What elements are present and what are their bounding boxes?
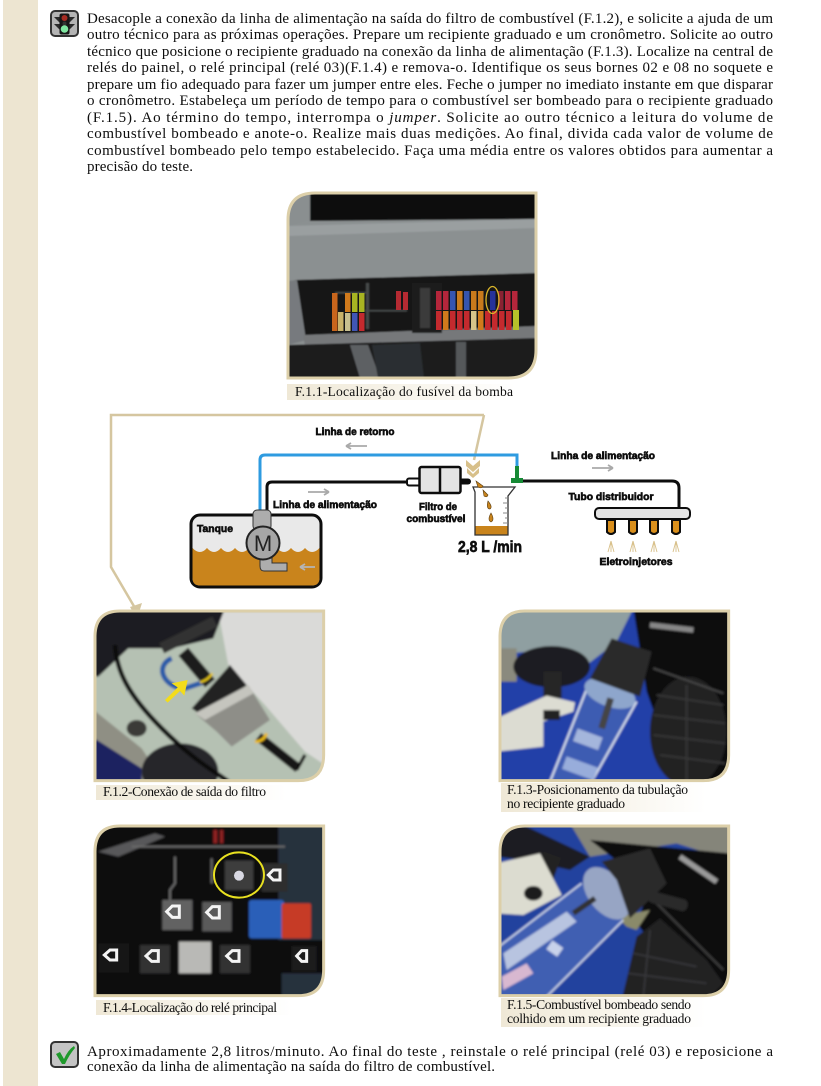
diagram labels: Linha de alimentação [551,450,655,462]
diagram labels: Filtro de [419,501,457,513]
instruction text block: prepare um fio adequado para fazer um jumper entre eles. Feche o jumper no imediato instante em que disparar [87,77,773,93]
instruction text block: combustível bombeado pelo tempo estabelecido. Faça uma média entre os valores obtidos para aumentar a [87,143,773,159]
fuses [332,291,519,331]
caption F.1.2: F.1.2-Conexão de saída do filtro [103,784,266,799]
photo F.1.1: fuse box [287,192,537,379]
answer text block: conexão da linha de alimentação na saída do filtro de combustível. [87,1059,495,1075]
photo F.1.4: relay panel [92,823,328,1000]
highlight ellipse on pump fuse [486,286,499,314]
caption F.1.1: F.1.1-Localização do fusível da bomba [295,384,513,399]
instruction text block: combustível bombeado e anote-o. Realize mais duas medições. Ao final, divida cada valor de volume de [87,126,773,142]
caption F.1.4: F.1.4-Localização do relé principal [103,1000,277,1015]
diagram labels: Tanque [197,523,233,535]
caption F.1.3: F.1.3-Posicionamento da tubulação [507,782,688,797]
instruction text block [87,11,773,175]
fuel filter [407,467,471,493]
yellow highlight ellipse on main relay [214,852,264,898]
diagram labels [197,426,673,568]
yellow arrow [165,680,188,703]
icon: green check mark [51,1042,78,1067]
instruction text block: precisão do teste. [87,159,193,175]
diagram labels: 2,8 L /min [458,539,522,556]
fuel tank with pump [191,510,321,587]
fuel system diagram [111,415,690,619]
photo F.1.3: graduated container on line [497,608,733,787]
instruction text block: (F.1.5). Ao término do tempo, interrompa o jumper. Solicite ao outro técnico a leitura do volume de [87,110,773,126]
instruction text block: relés do painel, o relé principal (relé 03)(F.1.4) e remova-o. Identifique os seus bornes 02 e 08 no soquete e [87,60,773,76]
beaker with fuel drops [473,481,515,535]
green T fitting [511,466,523,483]
instruction text block: o cronômetro. Estabeleça um período de tempo para o combustível ser bombeado para o recipiente graduado [87,93,773,109]
flow arrows [308,443,613,495]
caption F.1.3: no recipiente graduado [507,796,625,811]
return line [260,455,517,513]
photo F.1.2: filter outlet connection [94,610,326,782]
caption F.1.5 [501,997,706,1027]
instruction text block: Desacople a conexão da linha de alimentação na saída do filtro de combustível (F.1.2), e solicite a ajuda de um [87,11,773,27]
instruction text block: técnico que posicione o recipiente graduado na conexão da linha de alimentação (F.1.3). Localize na central de [87,44,773,60]
diagram labels: Tubo distribuidor [568,491,654,503]
feed line [267,481,679,513]
page margin strip [3,0,38,1086]
icon: traffic light [51,11,78,36]
diagram labels: Eletroinjetores [600,556,673,568]
caption F.1.5: F.1.5-Combustível bombeado sendo [507,997,691,1012]
photo F.1.5: fuel collected in container [497,823,733,1000]
diagram labels: Linha de alimentação [273,499,377,511]
answer text block: Aproximadamente 2,8 litros/minuto. Ao final do teste , reinstale o relé principal (relé 03) e reposicione a [87,1044,773,1060]
caption F.1.5: colhido em um recipiente graduado [507,1011,691,1026]
fuel tank with pump: M [254,531,272,556]
diagram labels: combustível [406,513,466,525]
instruction text block: outro técnico para as próximas operações. Prepare um recipiente graduado e um cronômetro. Solicite ao outro [87,27,773,43]
answer text block [87,1044,773,1075]
connector line to photo F.1.2 [111,415,484,619]
fuel rail and injectors [595,508,690,552]
diagram labels: Linha de retorno [316,426,394,438]
caption F.1.3 [501,782,706,812]
